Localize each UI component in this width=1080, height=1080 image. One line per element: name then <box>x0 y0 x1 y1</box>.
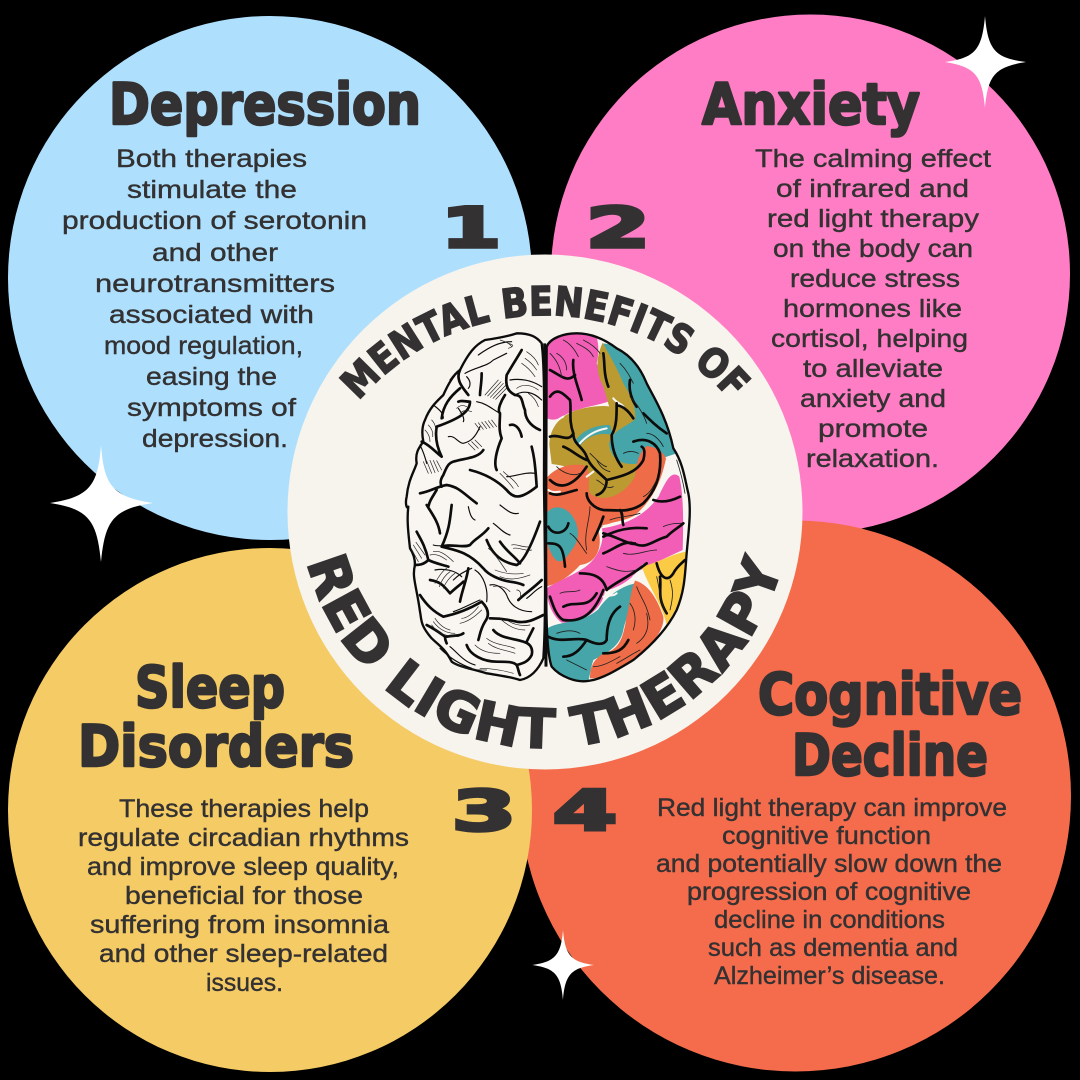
icon: sparkle star lower left <box>50 445 153 562</box>
text block: anxiety: cortisol, helping <box>771 325 968 353</box>
text block: anxiety: of infrared and <box>776 175 969 203</box>
text block: anxiety: reduce stress <box>790 265 960 293</box>
text block: sleep disorders: suffering from insomnia <box>90 911 389 939</box>
brain right hemisphere <box>545 330 690 685</box>
colour patches <box>545 330 687 685</box>
left upper sulci <box>420 340 542 507</box>
text block: cognitive decline: such as dementia and <box>708 934 958 962</box>
text block: cognitive decline: and potentially slow down the <box>656 850 1002 878</box>
text block: sleep disorders: and other sleep-related <box>99 940 388 968</box>
text block: cognitive decline: cognitive function <box>722 822 931 850</box>
text block: anxiety: to alleviate <box>803 355 943 383</box>
text block: depression: and other <box>152 239 278 267</box>
left lower sulci <box>411 505 543 675</box>
text block: anxiety <box>755 145 991 473</box>
brain left hemisphere <box>406 333 545 680</box>
text block: depression <box>62 145 367 453</box>
text block: cognitive decline: progression of cognitive <box>687 878 971 906</box>
heading: cognitive decline: Decline <box>792 723 988 789</box>
text block: anxiety: promote <box>818 415 928 443</box>
text block: anxiety: red light therapy <box>767 205 980 233</box>
panel: anxiety <box>551 14 1070 534</box>
curved title: red light therapy: RED LIGHT THERAPY <box>306 551 779 749</box>
heading: anxiety: Anxiety <box>702 72 920 138</box>
text block: depression: depression. <box>142 425 288 453</box>
heading: sleep disorders <box>78 655 354 780</box>
icon: sparkle star upper right <box>945 16 1026 108</box>
heading: depression: Depression <box>109 72 421 138</box>
number 1: 1 <box>441 196 501 260</box>
panel: sleep disorders <box>8 548 532 1072</box>
text block: depression: symptoms of <box>127 394 296 422</box>
curved title: mental benefits of: MENTAL BENEFITS OF <box>338 285 752 400</box>
text block: depression: Both therapies <box>116 145 307 173</box>
text block: cognitive decline: Alzheimer’s disease. <box>714 962 945 990</box>
number 2: 2 <box>586 196 650 260</box>
text block: anxiety: The calming effect <box>755 145 991 173</box>
panel: depression <box>8 16 532 540</box>
text block: depression: associated with <box>109 301 314 329</box>
text block: depression: production of serotonin <box>62 207 367 235</box>
text block: cognitive decline: decline in conditions <box>714 906 945 934</box>
text block: anxiety: hormones like <box>783 295 962 323</box>
illustration: brain <box>406 330 690 685</box>
text block: depression: neurotransmitters <box>95 270 335 298</box>
heading: cognitive decline: Cognitive <box>758 662 1022 728</box>
text block: sleep disorders: These therapies help <box>119 795 369 823</box>
text block: depression: mood regulation, <box>104 332 303 360</box>
text block: sleep disorders: and improve sleep quality, <box>87 853 399 881</box>
panel: central badge <box>288 254 802 770</box>
text block: anxiety: anxiety and <box>800 385 946 413</box>
text block: sleep disorders <box>78 795 409 997</box>
heading: sleep disorders: Disorders <box>78 714 354 780</box>
text block: sleep disorders: beneficial for those <box>125 882 363 910</box>
central fissure <box>545 343 546 667</box>
right sulci <box>548 353 685 657</box>
text block: anxiety: relaxation. <box>806 445 939 473</box>
text block: sleep disorders: regulate circadian rhythms <box>78 824 409 852</box>
number 3: 3 <box>452 779 516 843</box>
text block: cognitive decline <box>656 794 1007 990</box>
heading: sleep disorders: Sleep <box>135 655 285 721</box>
text block: anxiety: on the body can <box>773 235 973 263</box>
text block: depression: easing the <box>146 363 277 391</box>
text block: depression: stimulate the <box>127 176 297 204</box>
panel: cognitive decline <box>520 520 1071 1072</box>
text block: sleep disorders: issues. <box>206 969 283 997</box>
text block: cognitive decline: Red light therapy can improve <box>657 794 1007 822</box>
icon: sparkle star bottom center <box>532 930 594 1000</box>
number 4: 4 <box>553 779 617 843</box>
heading: cognitive decline <box>758 662 1022 789</box>
